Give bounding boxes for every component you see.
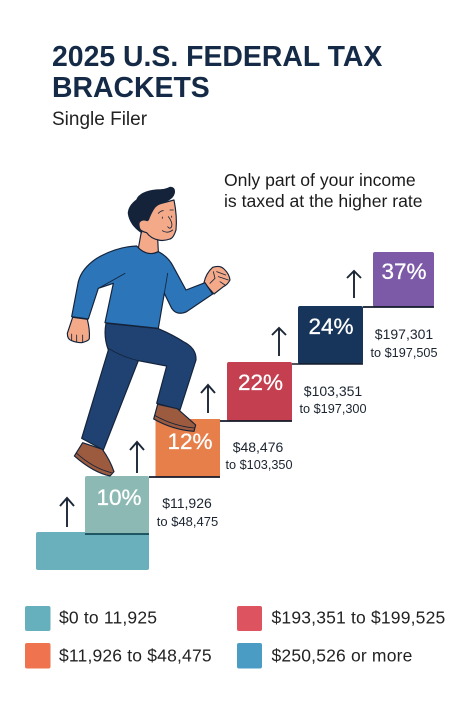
- 37% step: [363, 252, 434, 307]
- title: [52, 41, 382, 104]
- front shoe: [154, 404, 196, 431]
- person climbing stairs: [67, 187, 230, 476]
- arrow 5: [347, 271, 361, 298]
- callout note: [224, 170, 423, 211]
- 12% step: 12%: [167, 429, 213, 454]
- 24% step: [292, 306, 363, 364]
- back shoe: [74, 443, 114, 476]
- 37% step: 37%: [381, 259, 427, 284]
- arrow 4: [272, 328, 286, 356]
- range label 10%: to $48,475: [157, 514, 218, 529]
- 10% step: [85, 476, 149, 534]
- 22% step: 22%: [238, 370, 283, 395]
- range label 12%: [225, 439, 293, 472]
- range label 10%: $11,926: [162, 495, 212, 511]
- 10% step: 10%: [96, 485, 142, 510]
- range label 24%: [370, 326, 438, 360]
- 22% step: [220, 362, 292, 421]
- ear and face: [138, 200, 176, 240]
- left hand: [67, 317, 89, 343]
- range label 22%: to $197,300: [299, 402, 367, 416]
- range label 12%: to $103,350: [225, 458, 293, 472]
- right fist: [204, 266, 230, 294]
- range label 24%: $197,301: [375, 326, 433, 342]
- legend swatch: red: [237, 606, 262, 631]
- facial features: [158, 210, 173, 232]
- sweater: [72, 246, 213, 328]
- arrow 1: [60, 498, 74, 527]
- arrow 2: [130, 442, 144, 473]
- arrow 3: [201, 385, 215, 413]
- base step: [36, 532, 149, 570]
- legend text: blue: $250,526 or more: [272, 646, 413, 666]
- 24% step: 24%: [308, 314, 354, 339]
- legend text: orange: $11,926 to $48,475: [59, 646, 212, 666]
- callout note: Only part of your income: [224, 170, 416, 190]
- subtitle: Single Filer: [52, 109, 148, 130]
- title: BRACKETS: [52, 72, 210, 104]
- range label 10%: [157, 495, 218, 529]
- hair: [128, 187, 174, 233]
- trousers: [82, 323, 196, 450]
- fingers: [72, 272, 228, 342]
- title: 2025 U.S. FEDERAL TAX: [52, 41, 382, 73]
- neck: [138, 230, 158, 254]
- legend swatch: blue: [237, 643, 262, 668]
- clothing creases: [77, 273, 195, 473]
- legend text: teal: $0 to 11,925: [59, 608, 157, 628]
- legend text: red: $193,351 to $199,525: [272, 608, 445, 628]
- range label 22%: $103,351: [304, 383, 362, 399]
- legend: [25, 606, 445, 668]
- 12% step: [149, 419, 220, 477]
- range label 12%: $48,476: [233, 439, 284, 455]
- range label 22%: [299, 383, 367, 416]
- eyes: [162, 216, 172, 218]
- legend swatch: teal: [25, 606, 50, 631]
- range label 24%: to $197,505: [370, 346, 438, 360]
- legend swatch: orange: [25, 643, 50, 668]
- callout note: is taxed at the higher rate: [224, 191, 423, 211]
